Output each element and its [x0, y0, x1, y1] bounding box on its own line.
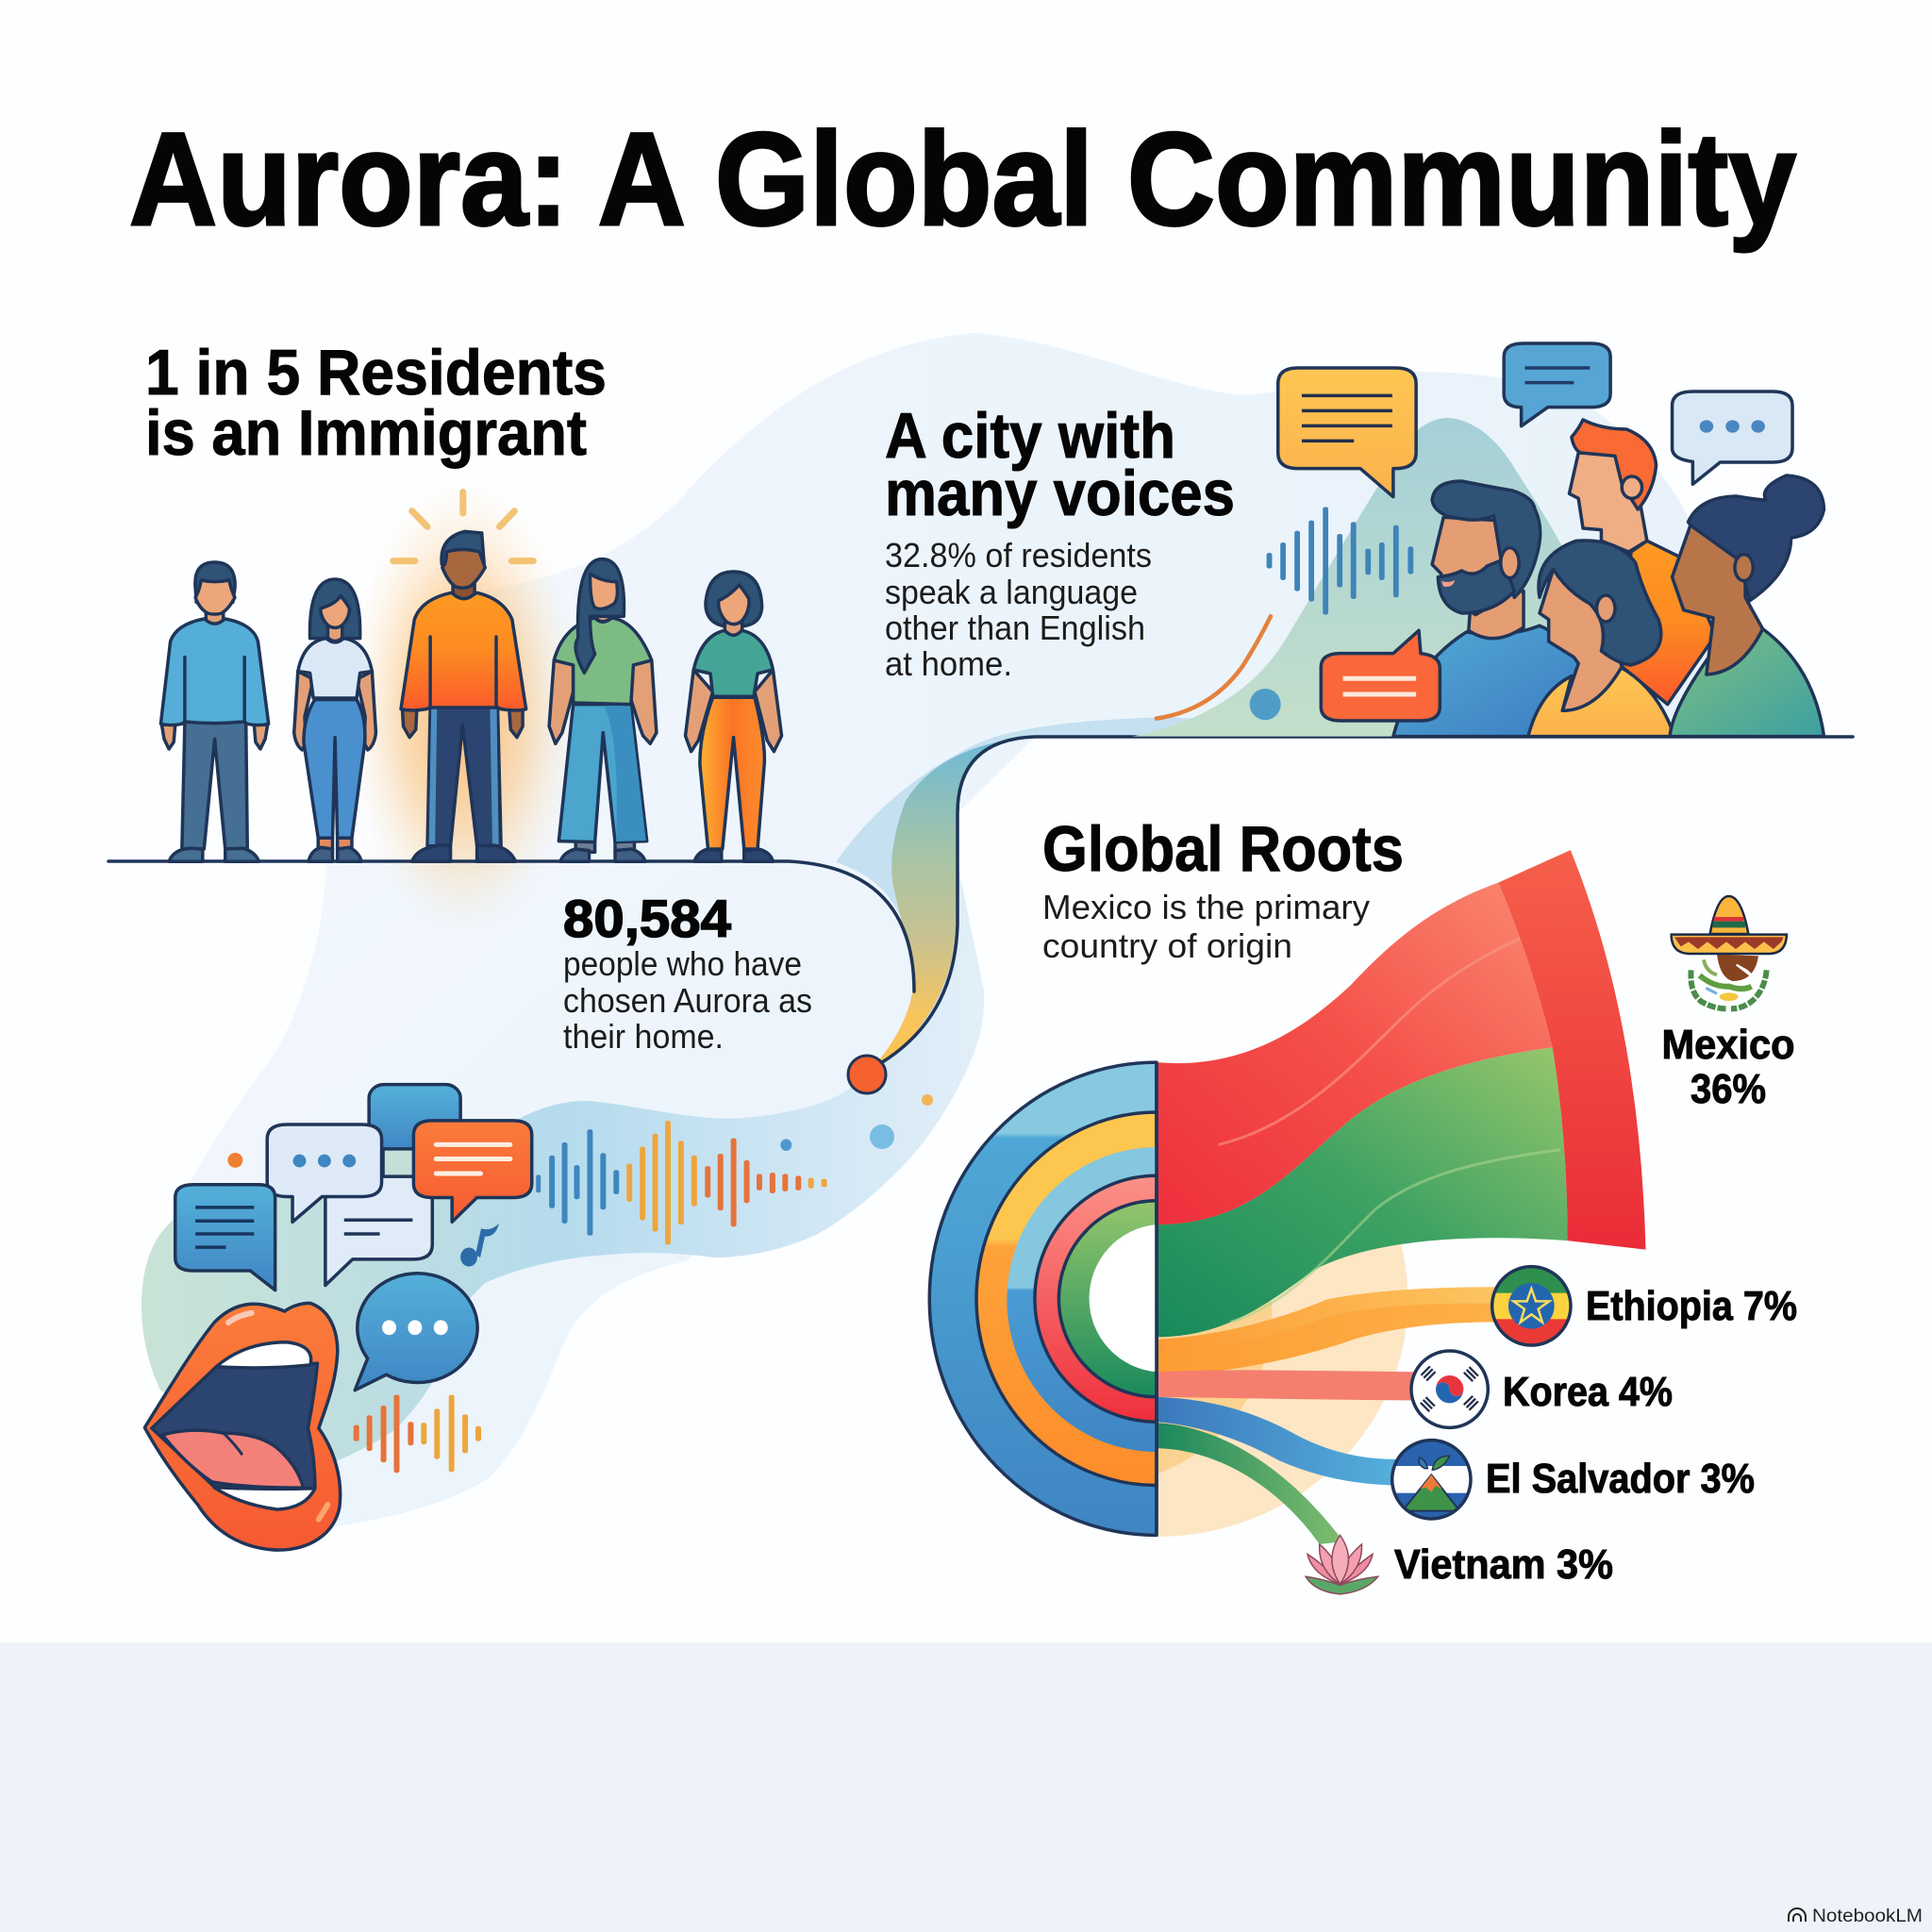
- person 4: [549, 559, 657, 861]
- heading: a city with many voices: A city with: [885, 400, 1175, 472]
- korea ribbon: [1157, 1370, 1414, 1400]
- label: korea: Korea 4%: [1503, 1369, 1673, 1415]
- text: language statistic: other than English: [885, 608, 1145, 647]
- text: language statistic: at home.: [885, 644, 1012, 683]
- small sound wave: [354, 1395, 481, 1473]
- long sound wave: [536, 1121, 827, 1244]
- text: primary country of origin: country of origin: [1042, 926, 1292, 965]
- heading: a city with many voices: many voices: [885, 458, 1235, 529]
- country flags: [1391, 1266, 1573, 1520]
- bearded man: [1393, 481, 1585, 737]
- gradient tube: [867, 740, 1010, 1074]
- person 1: [160, 562, 269, 861]
- hill behind the group: [1133, 418, 1608, 737]
- nested rings: [929, 1062, 1157, 1535]
- man with orange hair: [1570, 420, 1716, 705]
- label: mexico: 36%: [1690, 1066, 1766, 1112]
- connector ribbon and lines: [108, 737, 1853, 1149]
- pale speech bubble: [1673, 391, 1792, 484]
- bottom band: [0, 1642, 1932, 1932]
- label: el salvador: El Salvador 3%: [1486, 1456, 1755, 1502]
- flag: ethiopia: [1491, 1266, 1573, 1346]
- small blue dot: [870, 1124, 894, 1149]
- green ribbon: [1157, 1047, 1568, 1337]
- sound wave: [1267, 507, 1413, 615]
- small connector box: [383, 1149, 416, 1178]
- speech and mouth illustration: [144, 1085, 827, 1550]
- orange dot: [227, 1153, 242, 1168]
- people group: [160, 492, 782, 861]
- music note: [460, 1224, 499, 1266]
- person 2: [294, 579, 375, 861]
- right ground line: [873, 737, 1853, 1068]
- stat: 80,584: people who have: [563, 944, 802, 983]
- woman with yellow top: [1528, 541, 1674, 737]
- orange lines bubble: [413, 1121, 532, 1222]
- brim: [1672, 935, 1787, 954]
- small yellow dot: [922, 1094, 933, 1106]
- global roots chart: [929, 850, 1645, 1594]
- person 5: [686, 572, 782, 861]
- title: Aurora: A Global Community: [129, 105, 1796, 253]
- voices illustration: [1133, 343, 1824, 737]
- glow behind highlighted person: [348, 481, 578, 934]
- stat: 80,584: [563, 889, 812, 1056]
- vietnam ribbon: [1157, 1423, 1343, 1544]
- pale note bubble: [325, 1176, 432, 1285]
- notebooklm watermark: NotebookLM: [1812, 1907, 1923, 1926]
- blue lines bubble: [175, 1185, 275, 1291]
- pale dots bubble: [267, 1124, 382, 1222]
- heading: 1 in 5 residents: is an Immigrant: [145, 397, 587, 469]
- darker yellow halo: [1157, 1150, 1272, 1474]
- crown: [1710, 896, 1748, 934]
- label: mexico: Mexico: [1662, 1022, 1794, 1068]
- stat: 80,584: 80,584: [563, 889, 731, 948]
- heading: global roots: Global Roots: [1042, 813, 1404, 885]
- label: vietnam: Vietnam 3%: [1394, 1541, 1613, 1588]
- blue square bubble: [369, 1085, 460, 1151]
- pale yellow halo: [1157, 1062, 1407, 1537]
- text: language statistic: speak a language: [885, 573, 1138, 611]
- blue speech bubble: [1504, 343, 1610, 426]
- icon: sombrero and emblem: [1672, 896, 1787, 1008]
- emblem wreath: [1690, 970, 1767, 1008]
- el salvador ribbon: [1157, 1397, 1396, 1485]
- yellow speech bubble: [1278, 368, 1416, 497]
- blue dot: [1250, 689, 1281, 720]
- icon: lotus: [1306, 1535, 1378, 1594]
- connector dot: [848, 1056, 886, 1093]
- stat: 80,584: chosen Aurora as: [563, 981, 812, 1020]
- orange speech bubble: [1321, 630, 1440, 721]
- label: ethiopia: Ethiopia 7%: [1586, 1283, 1797, 1329]
- emblem eagle: [1717, 955, 1758, 981]
- text: primary country of origin: Mexico is the primary: [1042, 888, 1370, 926]
- left ground line: [108, 861, 914, 991]
- open mouth: [144, 1303, 341, 1550]
- flag: el salvador: [1391, 1440, 1472, 1520]
- woman with hair bun: [1670, 475, 1824, 737]
- text: language statistic: 32.8% of residents: [885, 536, 1152, 575]
- ethiopia ribbon: [1157, 1287, 1498, 1374]
- outer red fan: [1498, 850, 1645, 1250]
- red ribbon: [1157, 883, 1553, 1224]
- flowing background blobs: [142, 333, 1824, 1528]
- flag: korea: [1411, 1351, 1488, 1427]
- round chat bubble: [355, 1274, 477, 1391]
- person 3 highlighted: [401, 531, 526, 861]
- orange sweep: [1157, 616, 1271, 719]
- highlight rays: [393, 492, 533, 561]
- heading: 1 in 5 residents: 1 in 5 Residents: [145, 337, 607, 408]
- stat: 80,584: their home.: [563, 1017, 724, 1056]
